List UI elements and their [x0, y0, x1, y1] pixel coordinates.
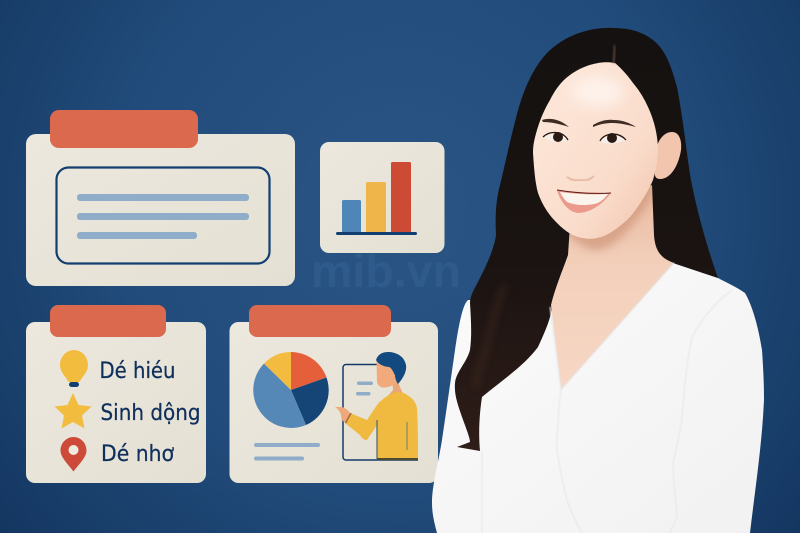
- label: Dé hiéu: Dé hiéu: [100, 359, 176, 384]
- neck and chest: [551, 170, 674, 390]
- icon: light bulb: [60, 350, 88, 387]
- card header tab: [50, 110, 198, 148]
- caption lines: [254, 443, 320, 460]
- left eyebrow: [542, 119, 569, 127]
- pie chart: [253, 352, 329, 428]
- label: Sinh dộng: Sinh dộng: [100, 401, 200, 426]
- panel: pie chart and presenter card: [230, 305, 438, 483]
- nose: [567, 176, 594, 180]
- left eye: [543, 132, 568, 142]
- hair parting highlight: [613, 45, 615, 63]
- face: [533, 62, 658, 239]
- forehead highlight: [572, 77, 624, 107]
- bar chart: [336, 162, 417, 235]
- card header tab: [249, 305, 391, 337]
- hair sheen: [476, 285, 505, 388]
- icon: map pin: [60, 437, 86, 472]
- label: Dé nhơ: Dé nhơ: [101, 442, 174, 467]
- card header tab: [50, 305, 166, 337]
- ear: [655, 132, 681, 179]
- right eyebrow: [593, 120, 636, 127]
- blouse seams: [482, 263, 732, 533]
- blouse: [432, 263, 764, 533]
- hair: [455, 28, 718, 451]
- watermark: mib.vn: [311, 245, 461, 297]
- panel: benefits list card: [26, 305, 206, 483]
- presentation board: [343, 364, 418, 460]
- icon: star: [54, 393, 92, 428]
- right eye: [600, 133, 626, 144]
- presenter figure: [335, 352, 418, 460]
- panel: large text card: [26, 110, 295, 286]
- smile: [557, 190, 611, 213]
- text frame with lines: [56, 168, 270, 264]
- panel: bar chart card: [320, 142, 444, 253]
- photo: smiling woman in white blouse: [432, 28, 764, 533]
